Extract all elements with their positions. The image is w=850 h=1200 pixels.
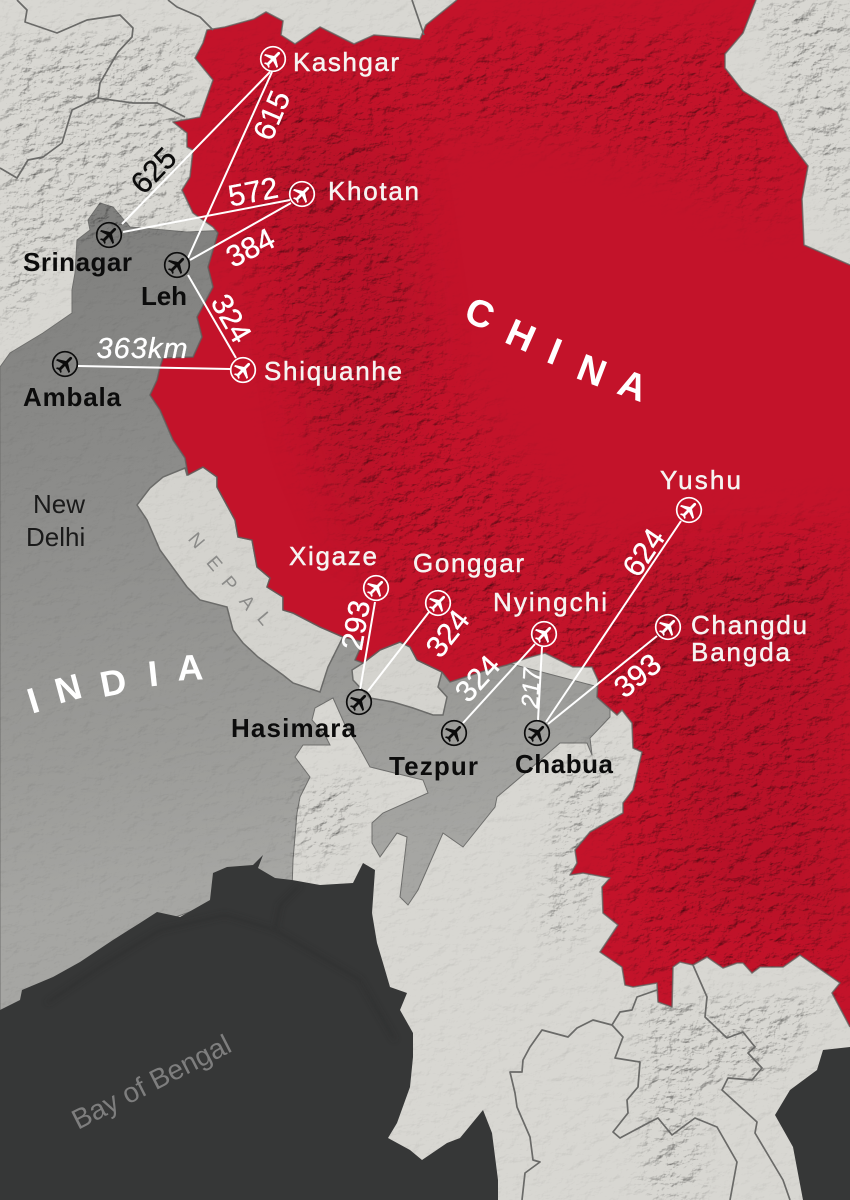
country label: Nepal: L <box>252 608 275 630</box>
label: Changdu: Changdu <box>691 610 807 640</box>
distance labels <box>96 86 672 710</box>
Indian airbase labels <box>23 247 614 781</box>
airbase: Khotan <box>289 181 315 207</box>
country label: India: D <box>96 660 130 705</box>
distance: Chabua to Yushu: 624 <box>617 523 672 583</box>
airbase: Srinagar <box>96 222 122 248</box>
airbases in China <box>230 46 702 647</box>
airbase: Yushu <box>676 497 702 523</box>
country label: Nepal: E <box>202 552 226 576</box>
label: Tezpur: Tezpur <box>389 751 478 781</box>
region: India <box>0 203 610 1020</box>
airbase: Ambala <box>52 351 78 377</box>
label: Chabua: Chabua <box>515 749 614 779</box>
airbase: Nyingchi <box>531 621 557 647</box>
country label: China: I <box>542 331 567 374</box>
airbase: Tezpur <box>441 720 467 746</box>
national borders: south-east <box>510 965 790 1200</box>
label: Hasimara: Hasimara <box>231 713 357 743</box>
country label: Nepal <box>183 529 275 630</box>
China border outline <box>150 0 850 1027</box>
airbase: Xigaze <box>363 575 389 601</box>
country label: China: H <box>499 312 541 361</box>
airbase: Chabua <box>524 720 550 746</box>
sea: Gulf of Thailand side <box>775 1047 850 1200</box>
national borders: north-west <box>0 0 424 178</box>
label: Xigaze: Xigaze <box>289 541 377 571</box>
country label: India: A <box>176 646 204 689</box>
city label: New Delhi: Delhi <box>26 522 85 552</box>
sea: shelf shading <box>47 885 395 1040</box>
airbase: Changdu Bangda <box>655 614 681 640</box>
label: Srinagar: Srinagar <box>23 247 132 277</box>
country label: China: C <box>459 290 500 339</box>
label: Yushu: Yushu <box>660 465 741 495</box>
label: Shiquanhe: Shiquanhe <box>264 356 402 386</box>
distance: Ambala to Shiquanhe: 363km <box>96 333 188 365</box>
distance: Srinagar to Khotan: 572 <box>226 171 281 213</box>
China rugged shading <box>302 153 830 916</box>
country label: China <box>459 290 653 411</box>
label: Leh: Leh <box>141 281 187 311</box>
city label: New Delhi <box>26 489 85 552</box>
airbase: Leh <box>164 252 190 278</box>
China terrain relief <box>199 1 850 1010</box>
region: China <box>149 0 850 1028</box>
country label: Nepal: A <box>235 591 259 615</box>
airbase: Hasimara <box>346 689 372 715</box>
label: Kashgar: Kashgar <box>293 47 399 77</box>
country label: Nepal: P <box>217 572 241 596</box>
country label: Nepal: N <box>183 529 208 553</box>
Chinese airbase labels <box>264 47 807 667</box>
label: Ambala: Ambala <box>23 382 122 412</box>
sea: Bay of Bengal <box>0 855 498 1200</box>
route lines <box>78 72 681 724</box>
label: Bangda: Bangda <box>691 637 791 667</box>
country label: India: I <box>22 679 44 722</box>
city label: New Delhi: New <box>33 489 85 519</box>
airbase: Shiquanhe <box>230 357 256 383</box>
label: Gonggar: Gonggar <box>413 548 524 578</box>
country label: India <box>22 646 204 722</box>
distance: Chabua to Nyingchi: 217 <box>517 666 546 710</box>
country label: India: N <box>50 665 86 712</box>
distance: Leh to Shiquanhe: 324 <box>204 289 258 349</box>
airbase: Gonggar <box>425 590 451 616</box>
region: Bhutan <box>352 642 447 715</box>
distance: Leh to Kashgar: 615 <box>247 86 297 145</box>
distance: Hasimara to Gonggar: 324 <box>420 604 477 664</box>
airbases in India <box>52 222 550 746</box>
label: Nyingchi: Nyingchi <box>493 587 607 617</box>
distance: Leh to Khotan: 384 <box>221 222 280 274</box>
region: Nepal <box>137 467 343 692</box>
country label: China: N <box>571 347 612 396</box>
distance: Chabua to Changdu Bangda: 393 <box>608 648 668 705</box>
country label: China: A <box>612 362 653 411</box>
distance: Tezpur to Nyingchi: 324 <box>449 649 507 709</box>
distance: Srinagar to Kashgar: 625 <box>125 142 183 201</box>
sea label: Bay of Bengal: Bay of Bengal <box>67 1029 236 1135</box>
label: Khotan: Khotan <box>328 176 419 206</box>
distance: Hasimara to Xigaze: 293 <box>336 598 377 653</box>
airbase: Kashgar <box>260 46 286 72</box>
country label: India: I <box>146 653 160 694</box>
